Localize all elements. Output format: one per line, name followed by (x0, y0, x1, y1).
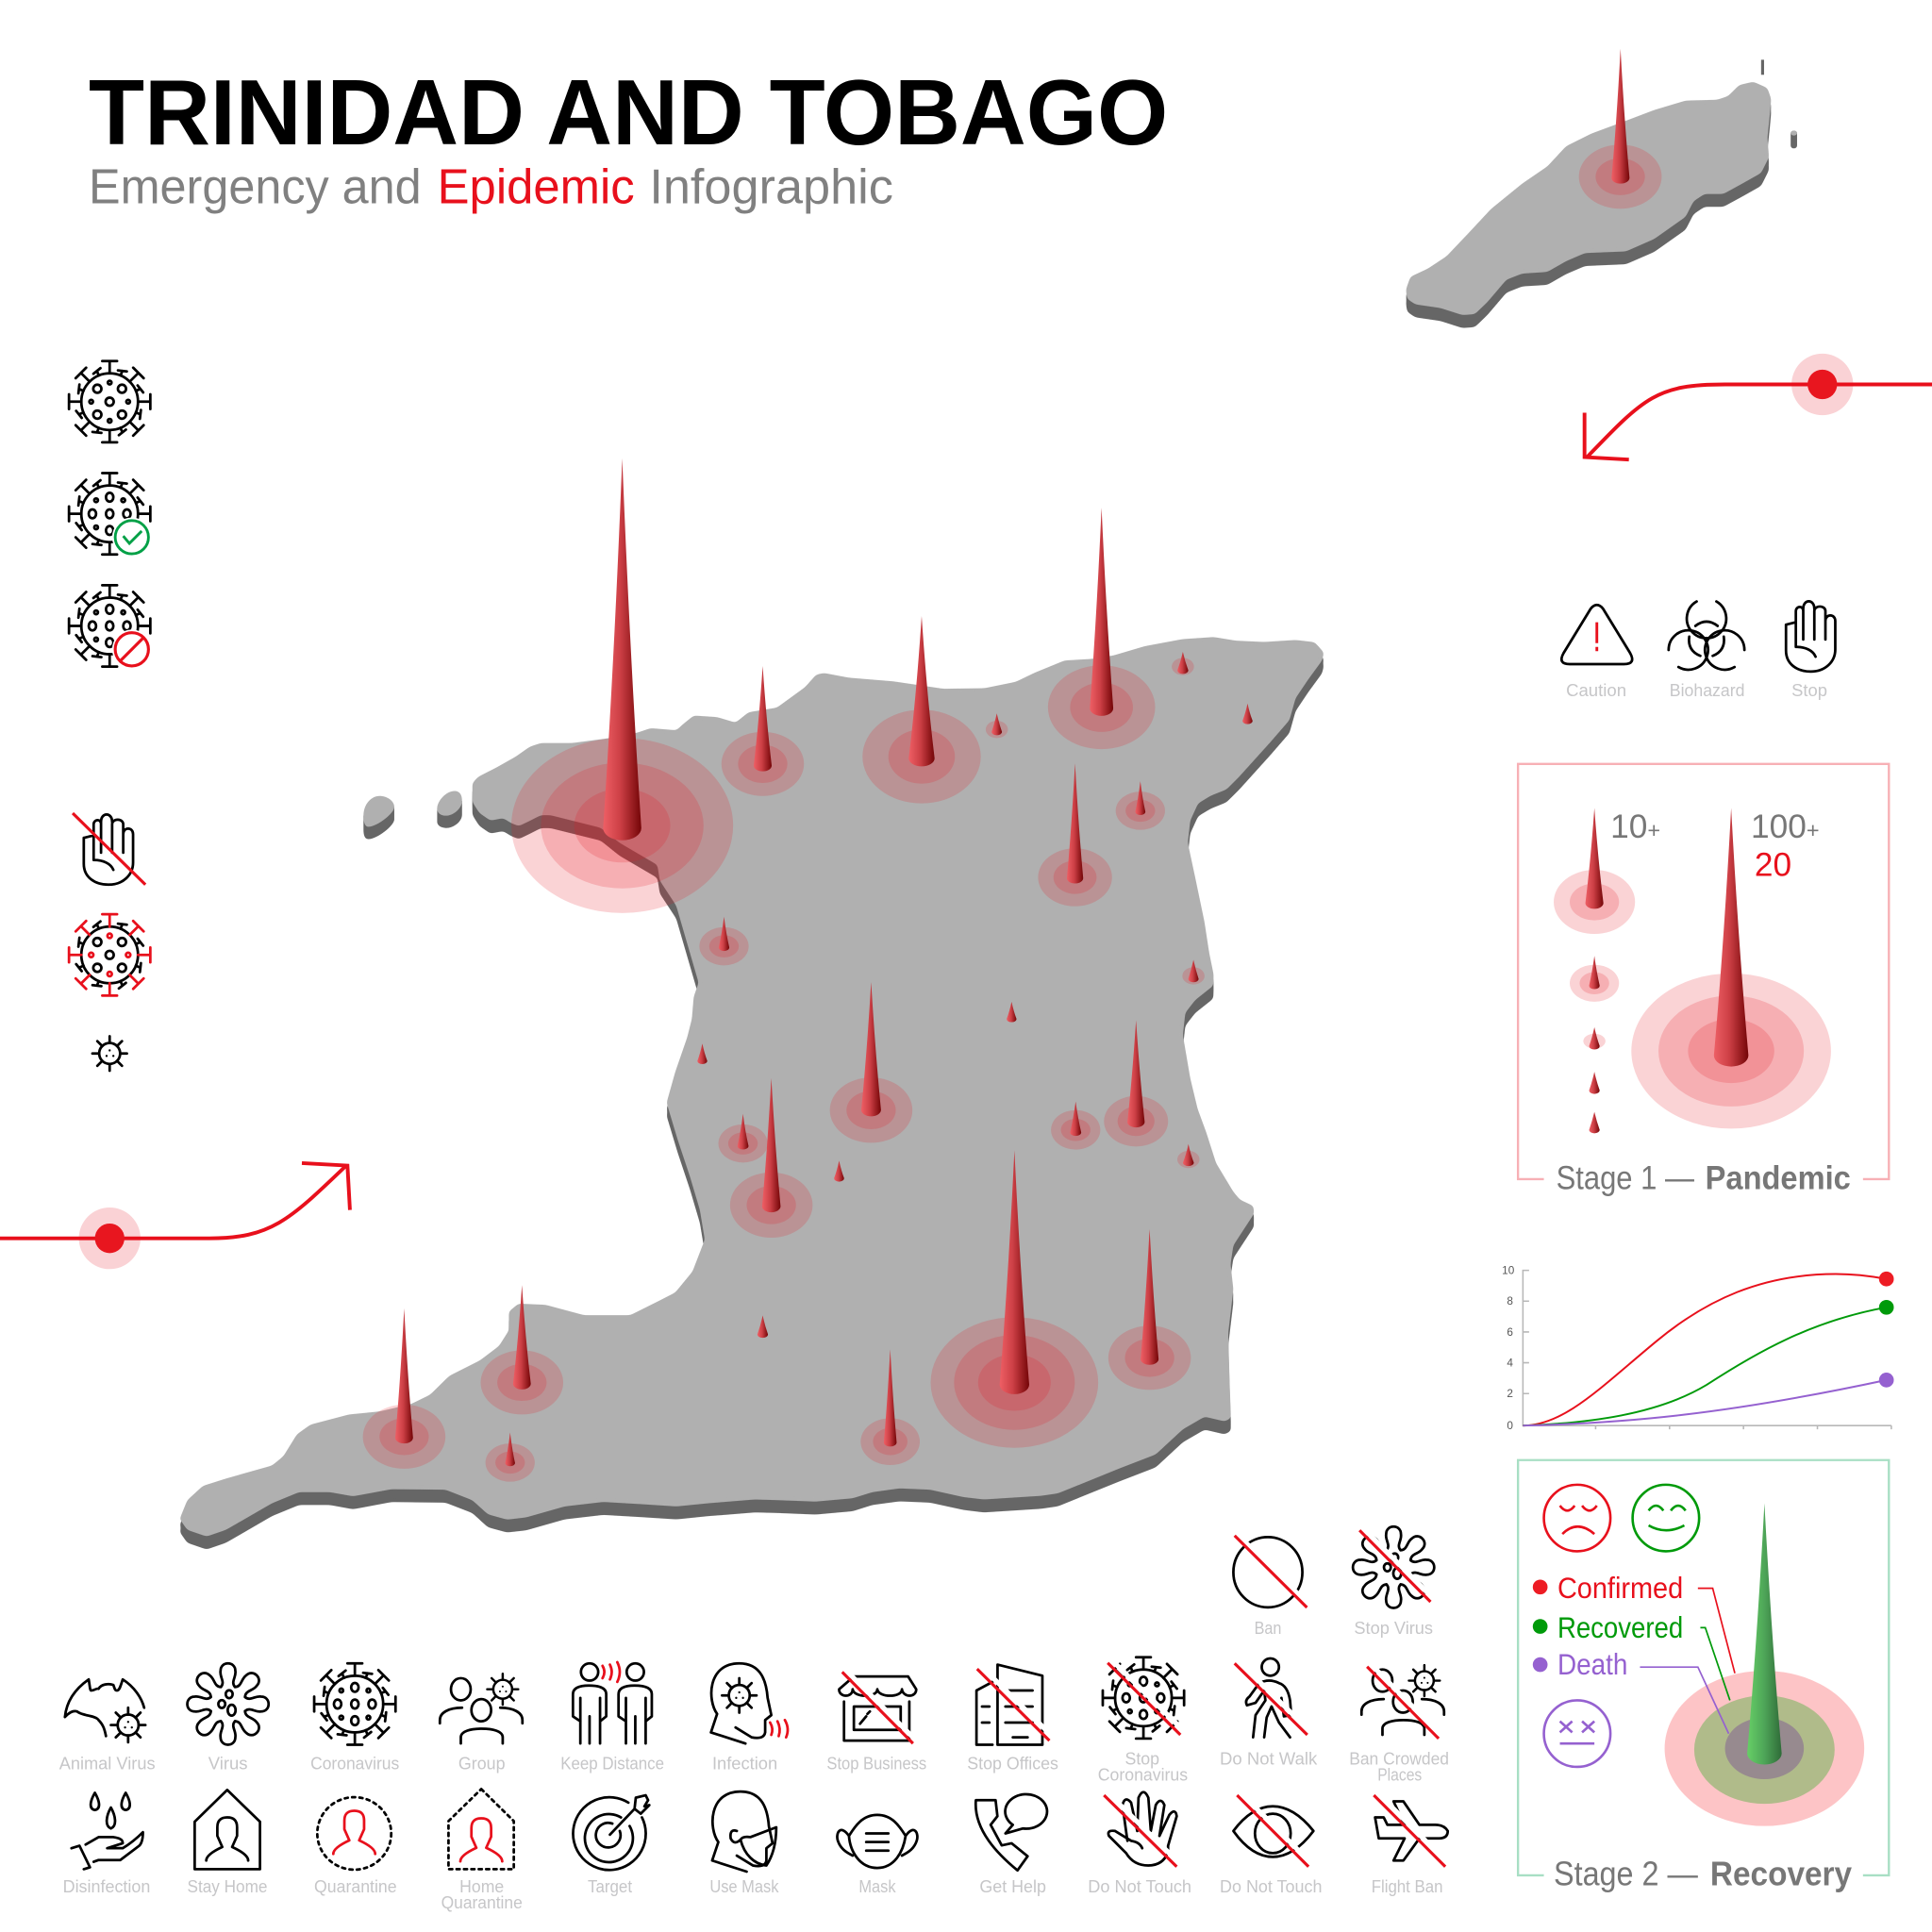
icon: sad face (1544, 1485, 1610, 1551)
icon: Target (573, 1795, 649, 1896)
spike (718, 1114, 768, 1162)
rings: recovery (1665, 1671, 1864, 1826)
spike (730, 1078, 812, 1238)
icon: Use Mask (709, 1791, 779, 1896)
icon: stop (1786, 601, 1835, 700)
icon: Stay Home (188, 1790, 267, 1896)
line chart: 4 (1507, 1357, 1513, 1369)
label: 10+: 10+ (1610, 808, 1660, 845)
icon: caution: Caution (1566, 680, 1626, 700)
icon: Animal Virus (59, 1679, 156, 1774)
icon: Target: Target (588, 1876, 632, 1896)
spike (1182, 959, 1205, 985)
spike (1177, 1144, 1200, 1168)
line chart: 0 (1507, 1420, 1513, 1432)
spike (1116, 781, 1165, 830)
icon: Home Quarantine: Quarantine (441, 1892, 523, 1912)
spike (1104, 1020, 1168, 1146)
icon: Stop Business: Stop Business (826, 1754, 926, 1774)
legend: Confirmed: Confirmed (1557, 1572, 1683, 1605)
spike: largest north-west (511, 458, 733, 913)
spike (363, 1308, 445, 1469)
icon: Animal Virus: Animal Virus (59, 1754, 156, 1774)
spike (1051, 1102, 1100, 1150)
icon: Do Not Walk: Do Not Walk (1220, 1748, 1318, 1768)
icon: Mask: Mask (858, 1876, 896, 1896)
icon: Ban Crowded Places: Ban Crowded (1349, 1748, 1449, 1768)
spike (862, 616, 981, 804)
icon: Ban (1233, 1535, 1311, 1638)
icon: Do Not Touch eye (1220, 1792, 1322, 1896)
icon: Quarantine: Quarantine (314, 1876, 397, 1896)
heading: Stage 2: Stage 2 — (1554, 1854, 1698, 1892)
map: Tobago island (1406, 59, 1797, 328)
spike (486, 1432, 535, 1482)
spike: green (1747, 1503, 1782, 1764)
icon: coronavirus (69, 361, 150, 442)
spike (1172, 652, 1194, 675)
spike (722, 666, 804, 796)
spike (1108, 1229, 1191, 1390)
icon: Stop Coronavirus: Stop (1124, 1748, 1159, 1768)
icon: Group (440, 1674, 523, 1774)
icon: small virus (92, 1036, 127, 1071)
legend: Death: Death (1557, 1648, 1627, 1681)
heading: Stage 1: Stage 1 — (1557, 1159, 1695, 1196)
legend spike (1590, 1112, 1600, 1133)
line chart: 2 (1507, 1388, 1513, 1400)
icon: virus checked (69, 474, 152, 557)
label: 20: 20 (1755, 847, 1791, 884)
icon: Stay Home: Stay Home (188, 1876, 267, 1896)
legend spike (1583, 1027, 1606, 1050)
icon: Do Not Touch hand (1088, 1792, 1191, 1896)
icon: Mask (837, 1815, 917, 1896)
icon: Disinfection (63, 1792, 150, 1896)
spike (699, 917, 749, 965)
icon: Stop Virus: Stop Virus (1354, 1618, 1433, 1638)
icon: no hand (73, 813, 145, 885)
spike (758, 1315, 768, 1338)
heading: Stage 2: Recovery (1710, 1854, 1853, 1892)
spike (481, 1285, 563, 1414)
icon: dead face (1544, 1700, 1610, 1767)
icon: Ban Crowded Places (1349, 1663, 1449, 1784)
heading: Stage 1: Pandemic (1706, 1159, 1851, 1196)
icon: red coronavirus (69, 914, 150, 995)
legend spike (1590, 1072, 1600, 1094)
spike (1038, 763, 1112, 907)
arrow: from right to map (1585, 354, 1932, 459)
panel: Stage 1 Pandemic (1518, 764, 1889, 1196)
subtitle: Infographic (649, 160, 893, 215)
subtitle: Epidemic (438, 160, 635, 215)
icon: caution (1561, 605, 1632, 700)
icon: Quarantine (314, 1797, 397, 1896)
map: west islets (363, 791, 462, 839)
icon: Do Not Touch hand: Do Not Touch (1088, 1876, 1191, 1896)
spike (697, 1043, 708, 1064)
spike: largest south (931, 1150, 1098, 1448)
icon: Group: Group (458, 1754, 506, 1774)
icon: Get Help (975, 1794, 1047, 1896)
icon: Home Quarantine: Home (459, 1876, 504, 1896)
spike (834, 1160, 844, 1182)
line chart: 8 (1507, 1295, 1513, 1307)
icon: Ban: Ban (1255, 1618, 1281, 1638)
title: TRINIDAD AND TOBAGO (89, 60, 1168, 164)
icon: Disinfection: Disinfection (63, 1876, 150, 1896)
spike (1242, 704, 1253, 724)
icon: Stop Business (826, 1670, 926, 1774)
subtitle: Emergency and (89, 160, 422, 215)
icon: Get Help: Get Help (979, 1876, 1046, 1896)
icon: Coronavirus: Coronavirus (310, 1754, 399, 1774)
icon: Keep Distance: Keep Distance (560, 1754, 664, 1774)
legend: Death (1533, 1648, 1627, 1681)
icon: Virus: Virus (208, 1754, 248, 1774)
icon: Flight Ban (1372, 1792, 1449, 1896)
icon: Coronavirus (310, 1663, 399, 1774)
icon: happy face (1633, 1485, 1699, 1551)
legend spike: 100+ (1631, 808, 1831, 1128)
heading: Stage 1 (1557, 1159, 1851, 1196)
spike (1048, 508, 1155, 749)
spike (1007, 1002, 1017, 1023)
leader lines (1640, 1589, 1735, 1734)
icon: Home Quarantine (441, 1789, 523, 1912)
icon: biohazard: Biohazard (1670, 680, 1744, 700)
arrow: from left to map (0, 1163, 350, 1269)
spike (986, 713, 1008, 738)
icon: Use Mask: Use Mask (709, 1876, 779, 1896)
line chart (1502, 1265, 1894, 1432)
subtitle (89, 160, 893, 215)
panel: Stage 2 Recovery (1518, 1460, 1889, 1892)
icon: Stop Virus (1353, 1526, 1434, 1638)
icon: Infection (711, 1663, 788, 1774)
icon: Keep Distance (560, 1662, 664, 1774)
icon: Flight Ban: Flight Ban (1372, 1876, 1442, 1896)
icon: stop: Stop (1791, 680, 1827, 700)
spike: Tobago (1579, 49, 1661, 208)
legend: Recovered: Recovered (1557, 1611, 1683, 1644)
line chart: 6 (1507, 1326, 1513, 1339)
icon: biohazard (1664, 602, 1749, 700)
icon: Infection: Infection (712, 1754, 777, 1774)
spike (830, 982, 912, 1142)
icon: Do Not Touch eye: Do Not Touch (1220, 1876, 1322, 1896)
legend spike: 10+ (1554, 808, 1635, 934)
icon: Stop Coronavirus: Coronavirus (1098, 1764, 1188, 1784)
icon: Virus (188, 1663, 269, 1774)
spike (860, 1349, 920, 1465)
icon: virus blocked (69, 585, 152, 669)
legend spike (1570, 956, 1619, 1002)
heading: Stage 2 (1554, 1854, 1853, 1892)
icon: Stop Offices: Stop Offices (967, 1754, 1058, 1774)
map: Trinidad island (179, 637, 1324, 1549)
icon: Stop Coronavirus (1098, 1657, 1188, 1784)
icon: Ban Crowded Places: Places (1377, 1764, 1422, 1784)
icon: Stop Offices (967, 1665, 1058, 1774)
icon: Do Not Walk (1220, 1658, 1318, 1768)
label: 100+: 100+ (1751, 808, 1820, 845)
line chart: 10 (1502, 1265, 1515, 1277)
